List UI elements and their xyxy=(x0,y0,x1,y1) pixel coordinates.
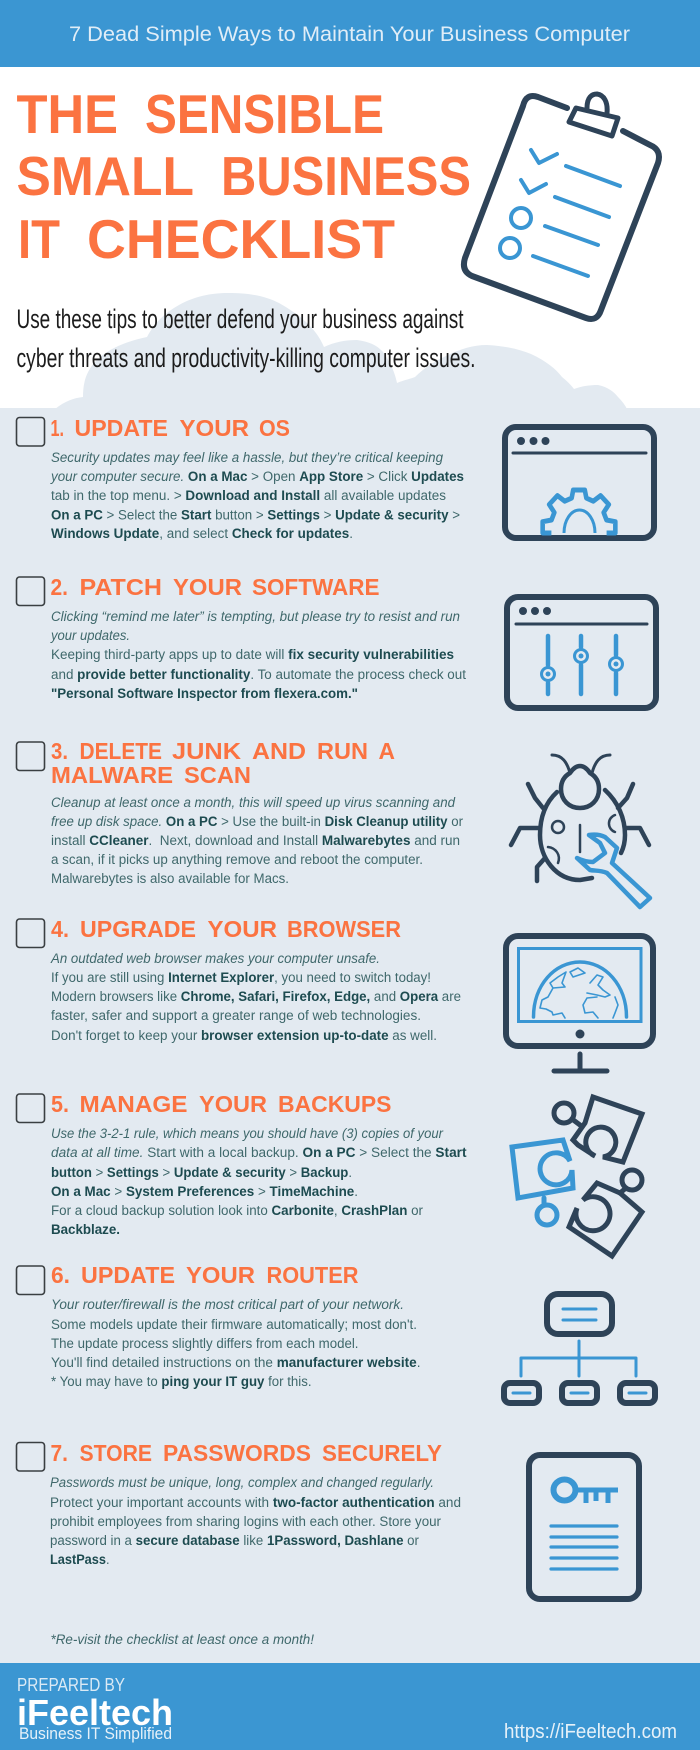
heading 1: YOUR xyxy=(180,415,249,441)
body text 1: your computer secure. On a Mac > Open App Store > Click Updates xyxy=(50,469,464,484)
body text 1: Security updates may feel like a hassle, but they’re critical keeping xyxy=(51,450,443,465)
body text 2: and provide better functionality. To automate the process check out xyxy=(51,667,466,682)
title: SENSIBLE xyxy=(145,83,384,145)
icon: document with key xyxy=(529,1455,639,1599)
body text 5: Backblaze. xyxy=(51,1222,120,1237)
checkbox 7 xyxy=(16,1442,44,1471)
heading 2: 2. xyxy=(50,574,68,600)
heading 6: YOUR xyxy=(186,1262,255,1288)
checkbox 5 xyxy=(16,1094,44,1122)
heading 4 xyxy=(51,916,401,942)
body text 1: tab in the top menu. > Download and Install all available updates xyxy=(51,488,446,503)
body text 5: On a Mac > System Preferences > TimeMachine. xyxy=(51,1184,358,1199)
body text 6: * You may have to ping your IT guy for this. xyxy=(51,1374,312,1389)
body text 3: install CCleaner. Next, download and Install Malwarebytes and run xyxy=(51,833,460,848)
body text 1: On a PC > Select the Start button > Settings > Update & security > xyxy=(51,508,460,522)
heading 3: RUN xyxy=(317,738,368,764)
body text 7: password in a secure database like 1Password, Dashlane or xyxy=(50,1533,419,1548)
body text 3: Cleanup at least once a month, this will speed up virus scanning and xyxy=(51,795,455,810)
body text 5 xyxy=(51,1126,467,1237)
title: THE xyxy=(16,83,118,145)
body text 7: Passwords must be unique, long, complex and changed regularly. xyxy=(50,1475,434,1490)
prepared by label: PREPARED BY xyxy=(17,1675,125,1695)
heading 2: SOFTWARE xyxy=(252,574,380,600)
checkbox 3 xyxy=(16,742,44,770)
heading 3: SCAN xyxy=(184,762,251,788)
checkbox 6 xyxy=(16,1266,44,1294)
body text 4: Don't forget to keep your browser extension up-to-date as well. xyxy=(51,1028,437,1043)
intro text xyxy=(16,304,476,373)
body text 1: Windows Update, and select Check for updates. xyxy=(51,526,353,541)
body text 1 xyxy=(50,450,464,541)
body text 7: prohibit employees from sharing logins with each other. Store your xyxy=(50,1514,441,1529)
heading 7: 7. xyxy=(50,1440,68,1466)
panel: top banner: 7 Dead Simple Ways to Maintain Your Business Computer xyxy=(69,23,630,46)
body text 3 xyxy=(51,795,463,886)
heading 6 xyxy=(51,1262,359,1288)
body text 2: "Personal Software Inspector from flexera.com." xyxy=(51,686,358,701)
heading 6: UPDATE xyxy=(81,1262,175,1288)
checkbox 1 xyxy=(16,418,44,446)
body text 7: Protect your important accounts with two-factor authentication and xyxy=(50,1495,461,1510)
icon: bug with wrench xyxy=(511,755,650,907)
heading 7: PASSWORDS xyxy=(163,1440,311,1466)
title xyxy=(16,83,471,270)
logo: iFeeltech: Business IT Simplified xyxy=(19,1724,172,1743)
checkbox 4 xyxy=(16,919,44,948)
heading 7: STORE xyxy=(80,1440,152,1466)
website url: https://iFeeltech.com xyxy=(504,1721,677,1743)
heading 1: OS xyxy=(259,415,290,441)
body text 6: The update process slightly differs from each model. xyxy=(51,1336,358,1351)
body text 6: Some models update their firmware automatically; most don't. xyxy=(51,1317,417,1332)
heading 3: MALWARE xyxy=(51,762,173,788)
heading 5 xyxy=(51,1091,392,1117)
body text 5: Use the 3-2-1 rule, which means you should have (3) copies of your xyxy=(51,1126,443,1141)
heading 1 xyxy=(50,415,290,441)
heading 4: UPGRADE xyxy=(80,916,196,942)
decorative cloud and light background panel xyxy=(0,293,700,1664)
body text 3: a scan, if it picks up anything remove and reboot the computer. xyxy=(51,852,423,867)
body text 7 xyxy=(50,1475,461,1567)
body text 2: Clicking “remind me later” is tempting, but please try to resist and run xyxy=(51,609,460,624)
body text 4: An outdated web browser makes your computer unsafe. xyxy=(50,951,380,966)
footnote: *Re-visit the checklist at least once a month! xyxy=(50,1632,314,1647)
heading 3: DELETE xyxy=(80,738,162,764)
panel: top banner xyxy=(0,0,700,67)
title: SMALL xyxy=(16,145,194,207)
body text 3: free up disk space. On a PC > Use the built-in Disk Cleanup utility or xyxy=(51,814,463,829)
title: CHECKLIST xyxy=(87,208,395,270)
body text 2: your updates. xyxy=(50,628,130,643)
intro text: Use these tips to better defend your business against xyxy=(16,304,464,334)
body text 6: Your router/firewall is the most critical part of your network. xyxy=(51,1297,404,1312)
panel: step 6 update your router xyxy=(16,1262,655,1403)
heading 4: YOUR xyxy=(208,916,277,942)
heading 4: 4. xyxy=(51,916,69,942)
body text 4: faster, safer and support a greater range of web technologies. xyxy=(51,1008,421,1023)
heading 7 xyxy=(50,1440,442,1466)
heading 7: SECURELY xyxy=(322,1440,442,1466)
body text 5: data at all time. Start with a local backup. On a PC > Select the Start xyxy=(51,1145,467,1160)
heading 3: JUNK xyxy=(172,738,241,764)
icon: puzzle pieces xyxy=(512,1097,642,1256)
icon: browser window with gear xyxy=(505,427,654,538)
heading 1: 1. xyxy=(50,415,64,441)
heading 5: BACKUPS xyxy=(278,1091,392,1117)
icon: monitor with globe xyxy=(506,936,653,1071)
body text 2: Keeping third-party apps up to date will fix security vulnerabilities xyxy=(51,647,454,662)
heading 6: ROUTER xyxy=(266,1262,359,1288)
intro text: cyber threats and productivity-killing computer issues. xyxy=(16,343,476,373)
icon: clipboard checklist xyxy=(464,94,659,319)
body text 6 xyxy=(51,1297,420,1389)
panel: step 7 store passwords securely xyxy=(16,1440,639,1599)
body text 6: You'll find detailed instructions on the manufacturer website. xyxy=(51,1355,420,1370)
body text 7: LastPass. xyxy=(50,1552,110,1567)
body text 2 xyxy=(50,609,466,701)
body text 4: If you are still using Internet Explorer, you need to switch today! xyxy=(51,970,431,985)
heading 2 xyxy=(50,574,380,600)
heading 1: UPDATE xyxy=(74,415,168,441)
heading 3: A xyxy=(378,738,395,764)
icon: browser window with sliders xyxy=(507,597,656,708)
body text 5: button > Settings > Update & security > Backup. xyxy=(51,1165,352,1180)
body text 5: For a cloud backup solution look into Carbonite, CrashPlan or xyxy=(51,1203,423,1218)
heading 5: MANAGE xyxy=(80,1091,188,1117)
body text 4: Modern browsers like Chrome, Safari, Firefox, Edge, and Opera are xyxy=(51,989,461,1004)
logo: iFeeltech: iFeeltech xyxy=(17,1692,173,1733)
title: IT xyxy=(18,208,60,270)
icon: network hierarchy xyxy=(504,1294,655,1403)
title: BUSINESS xyxy=(221,145,471,207)
heading 3: 3. xyxy=(51,738,68,764)
panel: step 5 manage your backups xyxy=(16,1091,642,1256)
body text 4 xyxy=(50,951,461,1043)
heading 6: 6. xyxy=(51,1262,70,1288)
heading 5: 5. xyxy=(51,1091,69,1117)
panel: step 1 update your OS xyxy=(16,415,654,541)
heading 4: BROWSER xyxy=(287,916,401,942)
panel: step 3 delete junk and run a malware scan xyxy=(16,738,650,907)
panel: step 2 patch your software xyxy=(16,574,656,708)
heading 3 xyxy=(51,738,395,788)
heading 2: PATCH xyxy=(80,574,162,600)
heading 3: AND xyxy=(252,738,306,764)
heading 5: YOUR xyxy=(199,1091,267,1117)
heading 2: YOUR xyxy=(173,574,242,600)
panel: footer xyxy=(0,1663,700,1750)
checkbox 2 xyxy=(16,577,44,606)
panel: step 4 upgrade your browser xyxy=(16,916,653,1071)
body text 3: Malwarebytes is also available for Macs. xyxy=(51,871,289,886)
